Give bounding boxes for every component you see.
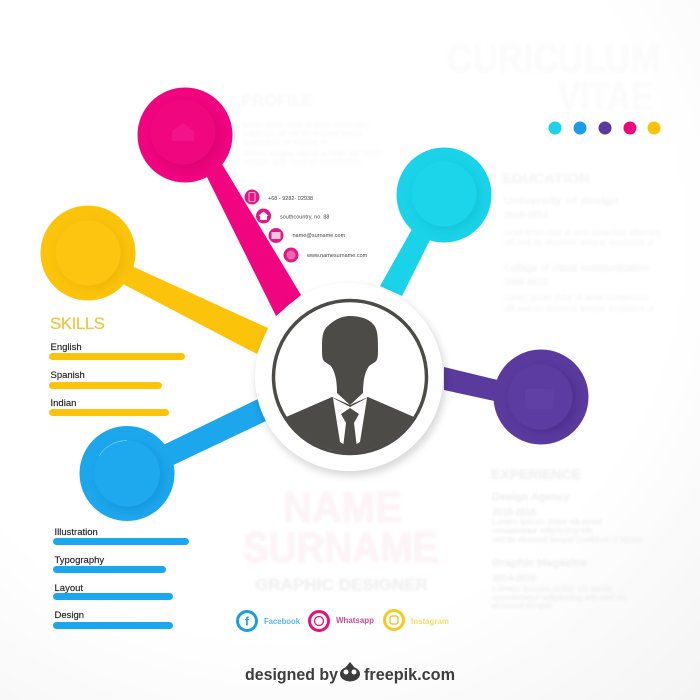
experience text: Graphic Magazine [492, 558, 587, 569]
profile text [241, 91, 383, 166]
arm: pink [201, 159, 301, 316]
experience text: Lorem ipsum dolor sit amet [492, 519, 602, 526]
social: instagram [384, 610, 449, 630]
title [447, 37, 660, 119]
profile text: dolore magna aliqua ut enim ad minim [243, 149, 383, 158]
skill labels: design [54, 527, 104, 621]
social: instagram: Instagram [411, 616, 449, 626]
job title: GRAPHIC DESIGNER [255, 577, 428, 594]
experience text: consectetur adipiscing elit [492, 528, 592, 535]
website: www.namesurname.com [306, 253, 368, 259]
experience text: consectetur adipiscing elit sed do [492, 595, 627, 602]
education text: 2006-2010 [504, 277, 548, 287]
skill labels: languages: Spanish [50, 370, 85, 381]
education text: EDUCATION [502, 170, 590, 186]
skills heading: SKILLS [50, 314, 105, 333]
footer credit [245, 662, 455, 684]
skill bars: design [53, 538, 189, 629]
social: whatsapp [310, 612, 374, 630]
icon: businessman silhouette [286, 316, 414, 460]
experience text: Lorem ipsum dolor sit amet [492, 586, 612, 593]
social: facebook: Facebook [264, 616, 300, 626]
experience text [491, 466, 642, 610]
profile portrait [255, 283, 446, 476]
phone: +68 - 9282- 02938 [268, 196, 313, 202]
colour dots [548, 122, 660, 134]
education text: elit sed do eiusmod tempor incididunt ut [504, 238, 655, 247]
address: southcountry, no. 88 [280, 214, 329, 220]
profile text: PROFILE [241, 91, 313, 110]
arm: purple [444, 367, 510, 404]
skill labels: languages [50, 342, 85, 409]
node: pink [138, 88, 232, 182]
education text: elit sed do eiusmod tempor incididunt ut [504, 304, 655, 313]
skill bars: languages [49, 353, 185, 416]
social: facebook [238, 612, 300, 630]
skill labels: design: Layout [54, 583, 83, 594]
education text [502, 170, 660, 313]
arm: blue [155, 398, 266, 469]
contact list [244, 190, 368, 262]
node: purple [494, 350, 588, 444]
arm: cyan [380, 222, 436, 296]
experience text: eiusmod tempor [492, 603, 553, 610]
experience text: EXPERIENCE [491, 466, 581, 482]
name [243, 484, 438, 572]
experience text: 2014-2015 [492, 573, 536, 583]
education text: 2010-2014 [504, 210, 548, 220]
title: CURICULUM [447, 37, 660, 81]
email: name@surname.com [292, 233, 346, 239]
skill labels: design: Typography [54, 555, 104, 566]
node: yellow [40, 206, 136, 300]
social: whatsapp: Whatsapp [336, 615, 374, 625]
education text: University of design [504, 196, 619, 207]
icon: freepik mascot [340, 662, 360, 682]
footer credit: freepik.com [364, 665, 455, 684]
profile text: incididunt ut labore et [243, 138, 329, 147]
profile text: veniam quis nostrud exercitation [243, 157, 361, 166]
profile text: Lorem ipsum dolor sit amet consectetur [243, 120, 369, 129]
skill labels: design: Illustration [54, 527, 98, 538]
name: SURNAME [243, 524, 438, 572]
skill labels: languages: Indian [50, 398, 76, 409]
node: blue [80, 426, 174, 521]
education text: College of visual communication [504, 263, 649, 274]
arm: yellow [119, 263, 268, 354]
node: cyan [396, 148, 492, 242]
social: facebook: f [245, 614, 250, 628]
skill labels: design: Design [54, 610, 84, 621]
footer credit: designed by [245, 665, 339, 684]
name: NAME [283, 484, 402, 532]
education text: Lorem ipsum dolor sit amet consectetur [504, 293, 649, 302]
skill labels: languages: English [50, 342, 82, 353]
experience text: Design Agency [492, 492, 570, 503]
experience text: 2015-2018 [492, 507, 536, 517]
title: VITAE [558, 75, 653, 119]
experience text: sed do eiusmod tempor incididunt ut labore [492, 537, 642, 544]
profile text: adipiscing elit sed do eiusmod tempor [243, 129, 363, 138]
education text: Lorem ipsum dolor sit amet consectetur adipiscing [504, 228, 660, 237]
